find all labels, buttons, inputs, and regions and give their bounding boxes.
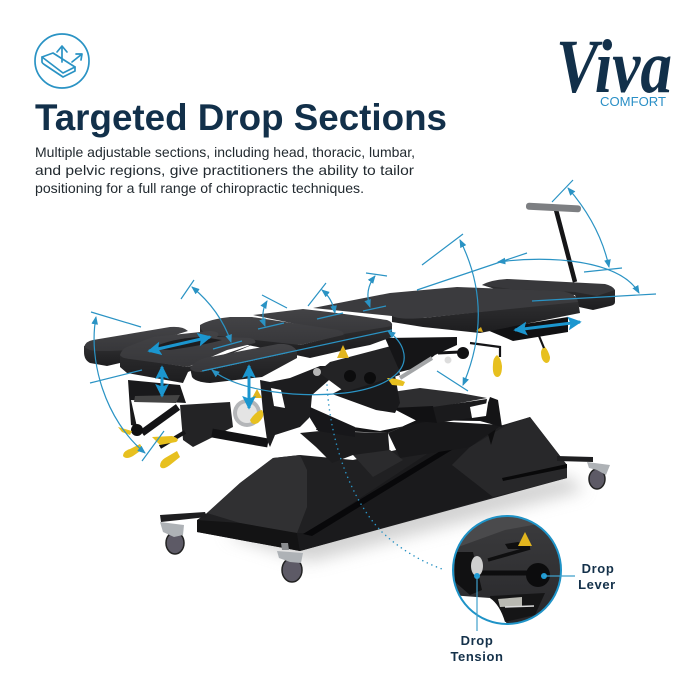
head mechanism — [128, 380, 268, 447]
warning label lower — [252, 389, 262, 398]
far head pad — [84, 327, 188, 366]
thick double arrows — [149, 322, 580, 408]
callout: drop lever: Drop — [582, 561, 614, 576]
lift frame — [300, 388, 502, 477]
title: Targeted Drop Sections — [35, 97, 447, 138]
arcs with arrowheads — [94, 188, 639, 453]
front right pad — [190, 344, 297, 383]
description text: and pelvic regions, give practitioners the ability to tailor — [35, 162, 414, 178]
callout: drop tension: Tension — [450, 649, 504, 664]
warning label — [337, 345, 349, 358]
section pad A — [200, 317, 345, 358]
description text: Multiple adjustable sections, including head, thoracic, lumbar, — [35, 144, 415, 160]
centre head pad — [120, 331, 255, 383]
main pad — [313, 287, 580, 333]
icon: adjustable section — [35, 34, 89, 88]
callout: drop tension: Drop — [461, 633, 493, 648]
section pad B — [253, 309, 392, 350]
chiropractic table — [84, 180, 656, 582]
logo: Viva Comfort: COMFORT — [600, 94, 666, 109]
callout: drop lever: Lever — [578, 577, 616, 592]
dotted connector — [327, 385, 445, 570]
floor shadow — [225, 475, 585, 562]
blue angle guides — [90, 180, 656, 461]
base — [197, 417, 567, 551]
description text — [35, 144, 415, 196]
callout: drop lever — [541, 561, 616, 592]
callout: drop tension — [450, 573, 504, 664]
casters — [160, 456, 610, 582]
drop levers under table — [438, 336, 544, 357]
foot pad — [482, 279, 615, 310]
foot rest post and handle — [526, 203, 581, 282]
mid mechanism — [260, 337, 457, 447]
guide lines — [90, 180, 656, 461]
yellow handles — [118, 347, 550, 468]
detail inset — [450, 512, 561, 630]
description text: positioning for a full range of chiropractic techniques. — [35, 180, 364, 196]
logo: Viva Comfort: Viva — [556, 25, 672, 109]
